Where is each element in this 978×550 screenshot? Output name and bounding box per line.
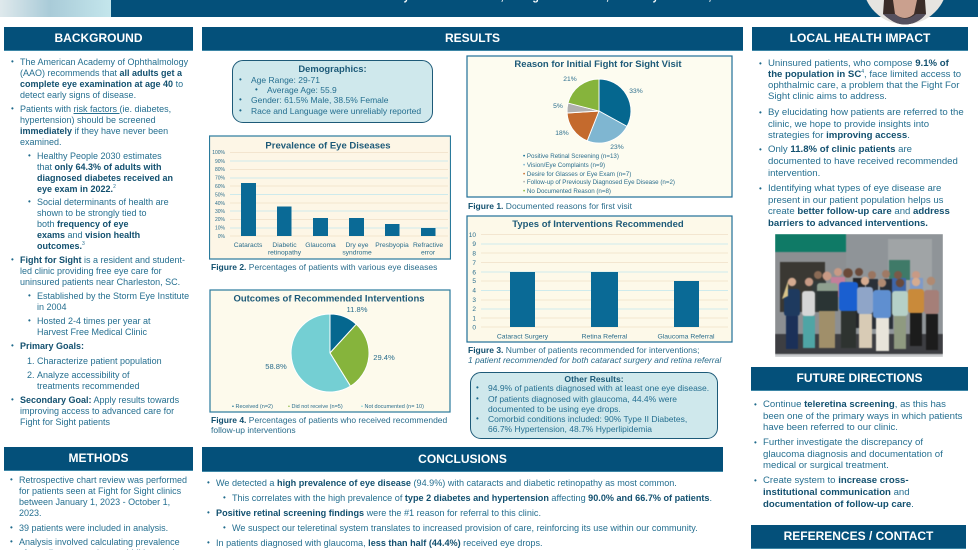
caption: figure 3 (468, 345, 722, 365)
bar chart: types of interventions (466, 215, 733, 343)
heading: conclusions (202, 447, 723, 472)
background sub-bullet: Healthy People 2030: Healthy People 2030 estimates (37, 151, 162, 161)
future bullet: teleretina (763, 399, 962, 434)
background bullet: risk factors: examined. (20, 137, 62, 147)
local bullet: elucidating: clinic, we hope to provide insights into (768, 118, 929, 130)
pie chart: reason for initial visit: 18% (555, 130, 569, 137)
caption: figure 4: follow-up interventions (211, 425, 296, 435)
future bullet: glaucoma discrepancy: Further investigate the discrepancy of (763, 437, 923, 448)
caption: figure 3: 1 patient recommended for both cataract surgery and retina referral (468, 355, 721, 365)
heading: methods (4, 447, 193, 471)
bar chart: prevalence of eye diseases (209, 135, 451, 260)
background sub-bullet: established: in 2004 (37, 302, 67, 312)
heading: references and contact (751, 525, 966, 549)
background sub-bullet: social determinants (37, 197, 169, 252)
header portrait photo (866, 0, 944, 24)
pie chart: reason for initial visit: Reason for Initial Fight for Sight Visit (514, 59, 682, 70)
background bullet: Fight for Sight (20, 255, 185, 288)
heading: local health impact (752, 27, 968, 51)
background bullet: Fight for Sight: led clinic providing free eye care for (20, 266, 162, 276)
local bullet: eye disease types: create better follow-up care and address (768, 206, 950, 217)
conclusion: retinal screening: Positive retinal screening findings were the #1 reason for referral to this clinic. (216, 508, 541, 518)
bar chart: prevalence of eye diseases: 20% (215, 217, 226, 223)
other results list: eye disease: 94.9% of patients diagnosed with at least one eye disease. (488, 383, 709, 393)
heading: conclusions: CONCLUSIONS (418, 452, 507, 466)
background bullet: AAO recommendation: complete eye examination at age 40 to (20, 79, 183, 89)
background sub-bullet: social determinants: outcomes.3 (37, 241, 85, 251)
pie chart: outcomes of recommended interventions: • Received (n=2) (232, 404, 273, 410)
bar chart: prevalence of eye diseases: Dry eye (345, 242, 369, 249)
future bullet: teleretina: been one of the primary ways in which patients (763, 410, 962, 422)
pie chart: outcomes of recommended interventions: Outcomes of Recommended Interventions (233, 294, 425, 304)
local bullet: uninsured: ophthalmic care, a problem that the Fight For (768, 80, 959, 91)
caption: figure 3: Figure 3. Number of patients recommended for interventions; (468, 345, 700, 355)
background bullet: Fight for Sight: Fight for Sight is a resident and student- (20, 255, 185, 265)
panel: background text: Analyze accessibility of (37, 370, 130, 380)
heading: local health impact: LOCAL HEALTH IMPACT (790, 31, 930, 45)
future bullet: cross-institutional (763, 475, 914, 510)
pie chart: reason for initial visit: 5% (553, 103, 563, 110)
other results title: Other Results: (564, 374, 624, 384)
demographics: race and language: Race and Language were unreliably reported (251, 106, 421, 116)
bar chart: prevalence of eye diseases: Prevalence of Eye Diseases (265, 140, 391, 152)
local bullet: eye disease types: Identifying what types of eye disease are (768, 183, 941, 194)
pie chart: reason for initial visit: 23% (610, 144, 624, 151)
background sub-bullet: established (37, 291, 189, 313)
methods bullet: chart review: between January 1, 2023 - October 1, (19, 497, 170, 507)
conclusion: glaucoma: In patients diagnosed with glaucoma, less than half (44.4%) received eye drops. (216, 538, 543, 548)
other results list: glaucoma: documented to be using eye drops. (488, 404, 621, 414)
background sub-bullet: hosted: Hosted 2-4 times per year at (37, 316, 151, 326)
conclusion: correlation: This correlates with the high prevalence of type 2 diabetes and hypertension affecting 90.0% and 66.7% of patients. (232, 492, 712, 502)
local bullet: eye disease types: present in our patient population helps us (768, 194, 943, 206)
demographics: average age: Average Age: 55.9 (267, 85, 337, 95)
bar chart: types of interventions: Types of Interventions Recommended (512, 219, 684, 230)
panel: conclusions text (207, 478, 712, 548)
background bullet: secondary goal: Fight for Sight patients (20, 417, 110, 427)
background bullet: AAO recommendation: (AAO) recommends that all adults get a (20, 68, 182, 78)
pie chart: reason for initial visit (466, 55, 733, 198)
primary goal 1: 1. (27, 356, 35, 366)
local bullet: uninsured: Uninsured patients, who compose 9.1% of (768, 58, 949, 68)
other results list: glaucoma (488, 394, 677, 414)
local bullet: 11.8 percent: Only 11.8% of clinic patients are (768, 144, 912, 155)
background sub-bullet: social determinants: both frequency of eye (37, 219, 129, 229)
pie chart: outcomes of recommended interventions: 29.4% (373, 353, 395, 362)
panel: methods text (10, 475, 187, 550)
bar chart: types of interventions: Cataract Surgery (497, 334, 549, 340)
bar chart: prevalence of eye diseases: syndrome (342, 250, 372, 256)
pie chart: reason for initial visit: • Vision/Eye Complaints (n=9) (523, 162, 605, 169)
future bullet: cross-institutional: documentation of follow-up care. (763, 499, 914, 510)
pie chart: reason for initial visit: • Follow-up of Previously Diagnosed Eye Disease (n=2) (523, 179, 675, 186)
methods bullet: chart review (19, 475, 187, 519)
background bullet: risk factors: Patients with risk factors (ie. diabetes, (20, 104, 171, 114)
conclusion: teleretinal: We suspect our teleretinal system translates to increased provision of care, reinforcing its use within our community. (232, 522, 698, 532)
background sub-bullet: social determinants: shown to be strongly tied to (37, 208, 147, 218)
local bullet: eye disease types: barriers to advanced interventions. (768, 218, 928, 228)
bar chart: prevalence of eye diseases: 0% (218, 234, 226, 240)
heading: future directions (751, 367, 968, 391)
heading: methods: METHODS (68, 451, 128, 465)
bar chart: types of interventions: 6 (472, 270, 476, 276)
panel: future directions text (754, 399, 962, 510)
local bullet: 11.8 percent (768, 144, 958, 180)
other results list: comorbid: Comorbid conditions included: 90% Type II Diabetes, (488, 414, 687, 424)
future bullet: glaucoma discrepancy: medical or surgical treatment. (763, 460, 889, 471)
photo: clinic team group (775, 234, 943, 357)
methods bullet: analysis: Analysis involved calculating prevalence (19, 537, 180, 547)
pie chart: reason for initial visit: • No Documented Reason (n=8) (523, 188, 611, 195)
background bullet: primary goals: Primary Goals: (20, 341, 84, 351)
bar chart: types of interventions: 10 (469, 232, 476, 239)
conclusion: high prevalence: We detected a high prevalence of eye disease (94.9%) with cataracts and diabetic retinopathy as most common. (216, 478, 677, 488)
local bullet: elucidating: strategies for improving access. (768, 130, 910, 141)
future bullet: teleretina: Continue teleretina screening, as this has (763, 399, 946, 410)
demographics: gender: Gender: 61.5% Male, 38.5% Female (251, 95, 388, 105)
pie chart: outcomes of recommended interventions: 11.8% (347, 305, 368, 314)
methods bullet: chart review: for patients seen at Fight for Sight clinics (19, 486, 181, 496)
pie chart: reason for initial visit: 33% (629, 88, 643, 95)
caption: figure 2: Figure 2. Percentages of patients with various eye diseases (211, 262, 437, 272)
pie chart: reason for initial visit: • Desire for Glasses or Eye Exam (n=7) (523, 171, 631, 178)
background bullet: Fight for Sight: uninsured patients near Charleston, SC. (20, 277, 180, 287)
background bullet: AAO recommendation (20, 57, 188, 101)
bar chart: prevalence of eye diseases: 10% (215, 226, 226, 232)
pie chart: outcomes of recommended interventions: • Did not receive (n=5) (288, 404, 343, 410)
panel: background text: treatments recommended (37, 381, 140, 391)
pie chart: outcomes of recommended interventions: 58.8% (265, 362, 287, 371)
bar chart: types of interventions: 3 (472, 297, 476, 304)
background bullet: risk factors: hypertension) should be screened (20, 115, 156, 125)
bar chart: types of interventions: Glaucoma Referral (657, 334, 715, 340)
methods bullet: chart review: Retrospective chart review was performed (19, 475, 187, 485)
future bullet: cross-institutional: institutional communication and (763, 487, 910, 498)
background sub-bullet: Healthy People 2030: eye exam in 2022.2 (37, 184, 116, 194)
bar chart: prevalence of eye diseases: 60% (215, 184, 226, 190)
heading: references and contact: REFERENCES / CONTACT (784, 529, 933, 543)
background sub-bullet: Healthy People 2030 (37, 151, 173, 195)
local bullet: uninsured: Sight clinic aims to address. (768, 91, 887, 102)
other results list: comorbid (488, 414, 687, 435)
demographics title: Demographics: (298, 63, 367, 74)
primary goal 2 (27, 370, 140, 391)
heading: future directions: FUTURE DIRECTIONS (796, 371, 922, 385)
bar chart: types of interventions: 8 (472, 250, 476, 258)
background sub-bullet: Healthy People 2030: that only 64.3% of adults with (37, 162, 162, 172)
header banner (0, 0, 978, 17)
background bullet: risk factors (20, 104, 171, 148)
caption: figure 4: Figure 4. Percentages of patients who received recommended (211, 415, 447, 425)
bar chart: prevalence of eye diseases: 30% (215, 209, 226, 215)
bar chart: prevalence of eye diseases: Presbyopia (375, 242, 409, 249)
background sub-bullet: hosted: Harvest Free Medical Clinic (37, 327, 147, 337)
background bullet: secondary goal: Secondary Goal: Apply results towards (20, 395, 179, 405)
background sub-bullet: hosted (37, 316, 151, 338)
future bullet: teleretina: have been referred to our clinic. (763, 422, 898, 433)
bar chart: prevalence of eye diseases: 40% (215, 201, 226, 207)
panel: local health impact text (759, 58, 964, 228)
future bullet: glaucoma discrepancy: glaucoma diagnosis and documentation of (763, 448, 943, 460)
pie chart: reason for initial visit: • Positive Retinal Screening (n=13) (523, 153, 619, 160)
local bullet: 11.8 percent: documented to have received recommended (768, 156, 958, 167)
background bullet: risk factors: immediately if they have never been (20, 126, 168, 136)
local bullet: 11.8 percent: intervention. (768, 168, 820, 179)
pie chart: outcomes of recommended interventions: • Not documented (n= 10) (361, 404, 424, 410)
local bullet: elucidating: By elucidating how patients are referred to the (768, 107, 964, 118)
background bullet: AAO recommendation: detect early signs of disease. (20, 90, 136, 100)
pie chart: reason for initial visit: 21% (563, 76, 577, 83)
bar chart: types of interventions: Retina Referral (582, 334, 628, 340)
local bullet: uninsured: the population in SC4, face limited access to (768, 69, 961, 80)
background sub-bullet: established: Established by the Storm Eye Institute (37, 291, 189, 301)
primary goal 1 (27, 356, 162, 366)
bar chart: prevalence of eye diseases: error (421, 250, 436, 256)
bar chart: types of interventions: 9 (472, 241, 476, 248)
caption: figure 4 (211, 415, 447, 435)
bar chart: types of interventions: 5 (472, 278, 476, 285)
background sub-bullet: Healthy People 2030: diagnosed diabetes received an (37, 173, 173, 183)
methods bullet: patients included: 39 patients were included in analysis. (19, 523, 168, 533)
future bullet: glaucoma discrepancy (763, 437, 943, 472)
bar chart: prevalence of eye diseases: retinopathy (268, 250, 302, 256)
bar chart: prevalence of eye diseases: 70% (215, 176, 226, 182)
local bullet: uninsured (768, 58, 961, 103)
background sub-bullet: social determinants: Social determinants of health are (37, 197, 169, 207)
panel: background text (11, 57, 189, 427)
bar chart: types of interventions: 7 (472, 260, 476, 267)
other results list: glaucoma: Of patients diagnosed with glaucoma, 44.4% were (488, 394, 677, 404)
bar chart: types of interventions: 2 (472, 306, 476, 313)
background bullet: secondary goal: improving access to advanced care for (20, 406, 174, 416)
header logo gradient (0, 0, 111, 17)
bar chart: prevalence of eye diseases: 80% (215, 167, 226, 173)
bar chart: prevalence of eye diseases: Diabetic (272, 242, 297, 249)
bar chart: types of interventions: 0 (472, 324, 476, 332)
bar chart: prevalence of eye diseases: 100% (212, 150, 226, 156)
bar chart: prevalence of eye diseases: Glaucoma (305, 242, 336, 249)
heading: background (4, 27, 193, 51)
other results list: comorbid: 66.7% Hypertension, 48.7% Hyperlipidemia (488, 424, 652, 434)
bar chart: types of interventions: 4 (472, 288, 476, 294)
callout: other results (470, 372, 718, 439)
local bullet: eye disease types (768, 183, 950, 229)
methods bullet: chart review: 2023. (19, 508, 42, 518)
background bullet: secondary goal (20, 395, 179, 428)
future bullet: cross-institutional: Create system to increase cross- (763, 475, 909, 486)
local bullet: elucidating (768, 107, 964, 142)
heading: results (202, 27, 743, 51)
pie chart: outcomes of recommended interventions (209, 289, 451, 413)
bar chart: prevalence of eye diseases: 90% (215, 159, 226, 165)
background bullet: AAO recommendation: The American Academy of Ophthalmology (20, 57, 188, 67)
heading: background: BACKGROUND (54, 31, 142, 45)
bar chart: prevalence of eye diseases: 50% (215, 192, 226, 198)
heading: results: RESULTS (445, 31, 500, 45)
panel: background text: Characterize patient population (37, 356, 162, 366)
callout: demographics (232, 60, 433, 123)
bar chart: types of interventions: 1 (472, 316, 476, 322)
background sub-bullet: social determinants: exams and vision health (37, 230, 140, 240)
bar chart: prevalence of eye diseases: Refractive (413, 242, 443, 249)
demographics: age range: Age Range: 29-71 (251, 74, 320, 84)
caption: figure 1: Figure 1. Documented reasons for first visit (468, 201, 632, 211)
primary goal 2: 2. (27, 370, 35, 380)
bar chart: prevalence of eye diseases: Cataracts (234, 242, 263, 249)
